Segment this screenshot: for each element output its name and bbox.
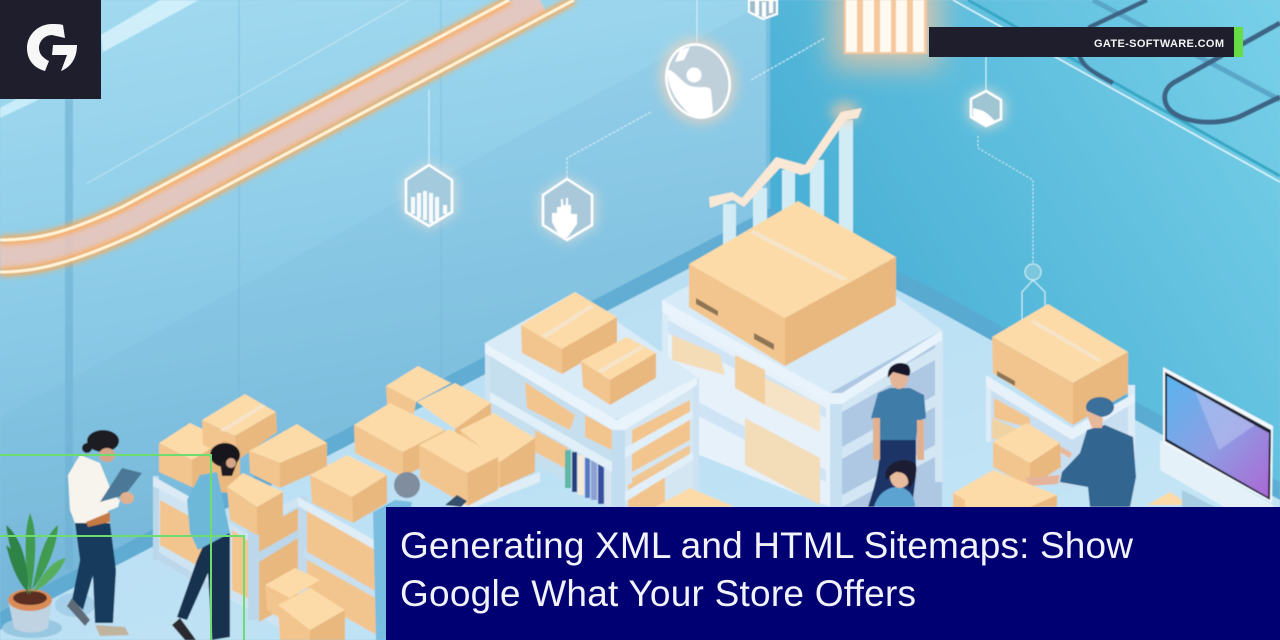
- box: big carton: [689, 201, 896, 366]
- green guide frames: [0, 455, 244, 640]
- title panel: Generating XML and HTML Sitemaps: Show: [400, 525, 1133, 566]
- shelf: second unit: [485, 292, 699, 510]
- title panel: [386, 507, 1280, 640]
- rising chart arrow: [709, 102, 862, 264]
- box: floor cartons: [655, 470, 1190, 512]
- box: held carton: [993, 423, 1061, 487]
- icon: small circle tag: [1025, 264, 1041, 280]
- shelving: foreground left: [153, 472, 540, 640]
- icon: hexagon chart 2: [540, 177, 596, 243]
- shelf: big centre unit: [662, 225, 943, 507]
- plant in pot: [2, 513, 66, 638]
- boxes: left stacks: [159, 366, 535, 640]
- title panel: Google What Your Store Offers: [400, 573, 916, 614]
- box: shelf carton B: [581, 337, 656, 405]
- connector lines: [429, 0, 1045, 320]
- shelf: right unit: [986, 375, 1135, 490]
- icon: donut chart: [650, 29, 746, 133]
- person: woman with tablet: [55, 430, 142, 636]
- domain bar: [929, 27, 1243, 57]
- icon: glowing bar chart: [832, 0, 940, 68]
- person: man in blue polo: [868, 363, 926, 507]
- person: man in blue shirt: [172, 443, 240, 640]
- logo tile: [0, 0, 101, 99]
- person: seated woman: [874, 460, 916, 507]
- monitor: [1160, 367, 1273, 535]
- box: shelf carton A: [521, 292, 617, 374]
- right wall pipes: [953, 0, 1280, 182]
- person: gray haired man: [373, 472, 467, 640]
- chart bars: [723, 120, 853, 264]
- icon: hexagon bar chart: [403, 163, 456, 229]
- box: right carton: [992, 304, 1128, 425]
- icon: small hexagon: [968, 88, 1005, 130]
- domain bar: GATE-SOFTWARE.COM: [1094, 38, 1224, 50]
- icon: top hexagon: [749, 0, 777, 19]
- person: packing worker: [1058, 397, 1136, 507]
- neon ribbon: [0, 0, 574, 272]
